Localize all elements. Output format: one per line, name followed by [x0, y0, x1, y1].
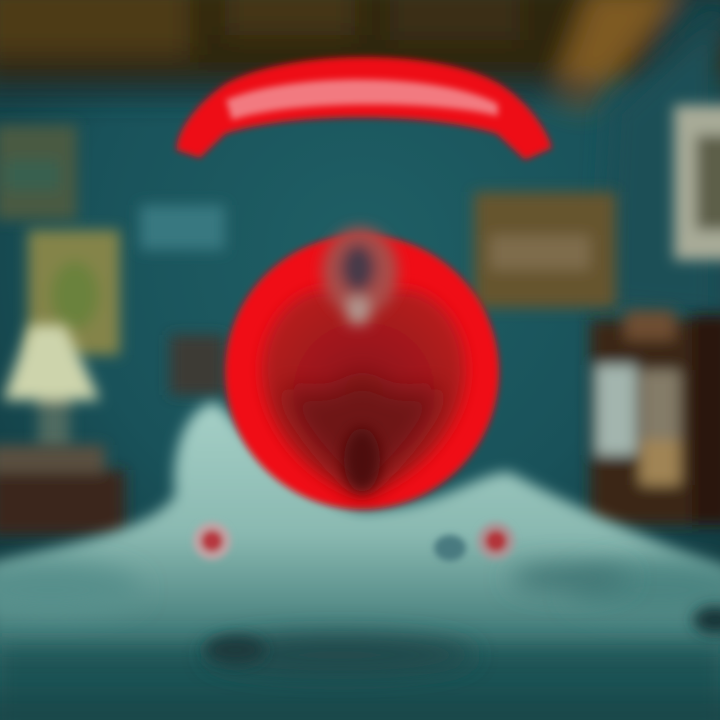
picture frame: upper right — [674, 105, 720, 260]
faded wall text — [140, 205, 225, 250]
ceiling beams — [0, 0, 720, 110]
picture frame: centre right — [474, 192, 616, 308]
vignette — [0, 695, 720, 720]
dresser: right — [590, 310, 720, 525]
red circle with heart — [225, 227, 499, 509]
picture frame: upper left — [0, 125, 77, 220]
headboard — [170, 335, 225, 395]
picture frame: left with greenery — [28, 230, 120, 355]
figure at top of circle — [322, 227, 398, 324]
right wall — [600, 10, 720, 320]
ribbon banner — [176, 57, 552, 160]
bed accent: right red dot — [434, 522, 515, 561]
lamp — [3, 325, 100, 450]
bed — [0, 402, 720, 720]
nightstand — [0, 445, 125, 535]
bed accent: left red dot — [193, 522, 231, 560]
